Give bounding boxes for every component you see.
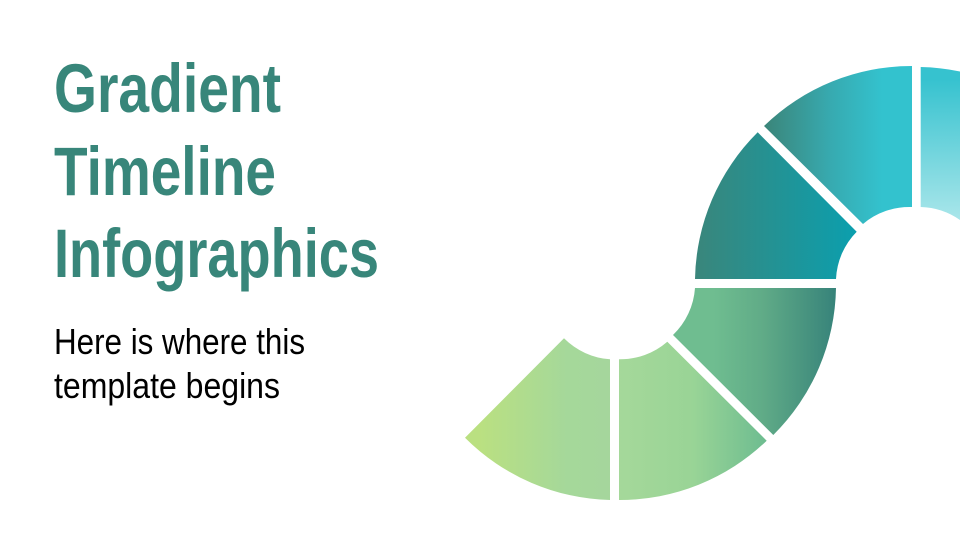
subtitle: template begins [54, 365, 280, 406]
segment: lower right [673, 288, 836, 435]
title: Infographics [54, 215, 379, 292]
title [54, 50, 379, 292]
subtitle [54, 321, 305, 406]
title: Gradient [54, 50, 281, 127]
subtitle: Here is where this [54, 321, 305, 362]
segment: lower middle [619, 342, 767, 500]
curved timeline [465, 66, 960, 500]
title: Timeline [54, 133, 276, 210]
segment: lower left [465, 338, 610, 500]
segment: upper left [695, 132, 857, 279]
segment: upper arc [764, 66, 912, 224]
segment: top right [921, 67, 960, 220]
